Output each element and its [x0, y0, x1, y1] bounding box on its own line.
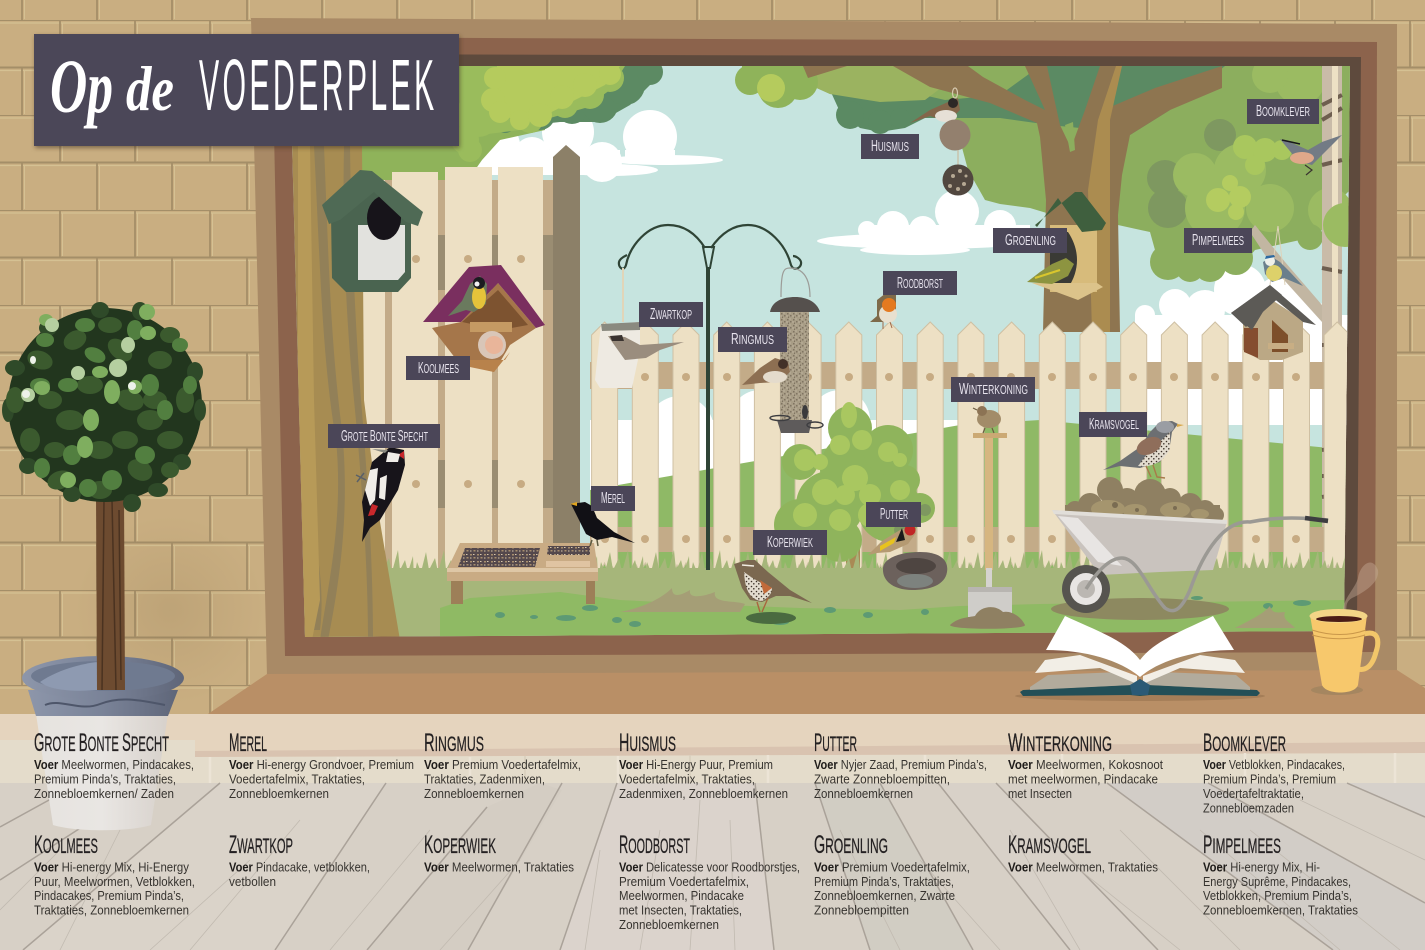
entry: grote bonte specht: Premium Pinda’s, Traktaties,	[34, 772, 176, 786]
entry: huismus: Voedertafelmix, Traktaties,	[619, 772, 755, 786]
label: merel	[591, 486, 635, 511]
entry: pimpelmees: PIMPELMEES	[1203, 831, 1281, 859]
fence post	[553, 145, 580, 575]
entry: roodborst: met Insecten, Traktaties,	[619, 902, 742, 918]
bird: putter	[868, 524, 916, 555]
entry: ringmus: Voer Premium Voedertafelmix,	[424, 757, 581, 772]
entry: grote bonte specht	[34, 729, 194, 801]
entry: zwartkop	[229, 831, 370, 889]
label: ringmus	[718, 327, 787, 352]
entry: merel: Voedertafelmix, Traktaties,	[229, 772, 365, 786]
shepherd hook pole	[619, 225, 801, 570]
groenling feeder	[1032, 192, 1106, 300]
entry: groenling: GROENLING	[814, 831, 888, 859]
bird: groenling	[1027, 258, 1074, 284]
entry: winterkoning: met meelwormen, Pindacake	[1008, 772, 1158, 786]
big fence boards on the left	[360, 167, 553, 575]
label: merel: MEREL	[601, 490, 625, 507]
book spine	[1130, 679, 1150, 695]
bird: roodborst	[870, 293, 897, 329]
entry: boomklever	[1203, 729, 1345, 816]
entry: pimpelmees: Energy Suprême, Pindacakes,	[1203, 874, 1351, 889]
entry: putter	[814, 729, 987, 801]
entry: putter: Zwarte Zonnebloempitten,	[814, 772, 950, 786]
canopy top left	[362, 66, 663, 180]
entry: koolmees: KOOLMEES	[34, 831, 98, 859]
entry: kramsvogel: Voer Meelwormen, Traktaties	[1008, 860, 1158, 874]
entry: koolmees: Voer Hi-energy Mix, Hi-Energy	[34, 860, 189, 874]
entry: boomklever: BOOMKLEVER	[1203, 729, 1286, 757]
entry: huismus	[619, 729, 788, 801]
entry: boomklever: Voedertafeltraktatie,	[1203, 786, 1304, 801]
wheelbarrow	[1051, 477, 1328, 620]
canopy top middle and right	[735, 55, 1352, 282]
label: koperwiek: KOPERWIEK	[767, 534, 813, 551]
ringmus feeder	[770, 268, 823, 433]
label: koolmees: KOOLMEES	[418, 360, 459, 377]
label: grote bonte specht: GROTE BONTE SPECHT	[341, 428, 428, 445]
book cover	[1020, 679, 1260, 696]
entry: winterkoning: met Insecten	[1008, 786, 1072, 801]
entry: pimpelmees	[1203, 831, 1358, 918]
book shadow	[1015, 691, 1265, 701]
nest box	[322, 170, 423, 292]
entry: roodborst: Voer Delicatesse voor Roodborstjes,	[619, 860, 800, 874]
bird: huismus	[910, 98, 960, 123]
bird: winterkoning	[973, 406, 1001, 433]
entry: roodborst: Zonnebloemkernen	[619, 917, 719, 932]
label: putter: PUTTER	[880, 506, 908, 523]
bird: koolmees	[448, 276, 487, 316]
entry: roodborst: Meelwormen, Pindacake	[619, 888, 744, 903]
entry: ringmus: Traktaties, Zadenmixen,	[424, 772, 545, 786]
mug handle	[1355, 633, 1378, 669]
label: putter	[866, 502, 921, 527]
book raised pages	[1046, 616, 1140, 677]
label: kramsvogel	[1079, 412, 1147, 437]
mug body	[1310, 615, 1367, 692]
label: koolmees	[406, 356, 470, 380]
soil heap	[1065, 477, 1224, 523]
entry: ringmus: RINGMUS	[424, 729, 484, 757]
label: huismus	[861, 134, 919, 159]
coffee mug	[1310, 562, 1378, 695]
entry: grote bonte specht: Voer Meelwormen, Pindacakes,	[34, 757, 194, 772]
species list	[34, 729, 1358, 932]
mug steam	[1343, 562, 1378, 618]
entry: roodborst: ROODBORST	[619, 831, 690, 859]
label: pimpelmees: PIMPELMEES	[1192, 232, 1244, 249]
label: winterkoning: WINTERKONING	[959, 381, 1028, 398]
dirt pile at shovel	[950, 607, 1025, 629]
birch tree	[1252, 66, 1348, 568]
bird: merel	[570, 502, 635, 546]
left tree trunk	[292, 146, 400, 640]
label: zwartkop: ZWARTKOP	[650, 306, 692, 323]
bird: pimpelmees	[1263, 255, 1303, 286]
label: roodborst: ROODBORST	[897, 275, 943, 292]
entry: kramsvogel	[1008, 831, 1158, 874]
entry: boomklever: Zonnebloemzaden	[1203, 800, 1294, 816]
barrow wheel	[1062, 565, 1110, 613]
entry: huismus: Zadenmixen, Zonnebloemkernen	[619, 786, 788, 801]
entry: koolmees: Pindacakes, Premium Pinda’s,	[34, 888, 184, 903]
entry: huismus: Voer Hi-Energy Puur, Premium	[619, 757, 773, 772]
entry: groenling: Zonnebloemkernen, Zwarte	[814, 888, 955, 903]
entry: winterkoning	[1008, 729, 1163, 801]
entry: groenling	[814, 831, 970, 918]
entry: huismus: HUISMUS	[619, 729, 676, 757]
entry: roodborst	[619, 831, 800, 932]
barrow shadow	[1051, 598, 1229, 620]
label: roodborst	[883, 271, 957, 295]
entry: ringmus	[424, 729, 581, 801]
barrow tray	[1052, 510, 1227, 575]
label: groenling: GROENLING	[1005, 232, 1056, 249]
entry: pimpelmees: Vetblokken, Premium Pinda’s,	[1203, 888, 1352, 903]
entry: zwartkop: vetbollen	[229, 874, 276, 889]
bird: grote bonte specht	[356, 447, 405, 542]
ground	[290, 548, 1350, 640]
entry: pimpelmees: Voer Hi-energy Mix, Hi-	[1203, 860, 1320, 874]
shovel	[968, 433, 1012, 617]
book lower pages	[1030, 672, 1137, 690]
entry: putter: PUTTER	[814, 729, 857, 757]
entry: koperwiek: Voer Meelwormen, Traktaties	[424, 860, 574, 874]
window sill	[205, 670, 1425, 716]
title word VOEDERPLEK: VOEDERPLEK	[199, 45, 438, 126]
bird: zwartkop	[608, 335, 684, 360]
entry: koolmees: Puur, Meelwormen, Vetblokken,	[34, 874, 195, 889]
olive leaf mass	[810, 66, 1350, 268]
entry: merel: MEREL	[229, 729, 267, 757]
entry: pimpelmees: Zonnebloemkernen, Traktaties	[1203, 902, 1358, 918]
entry: zwartkop: Voer Pindacake, vetblokken,	[229, 860, 370, 874]
entry: kramsvogel: KRAMSVOGEL	[1008, 831, 1091, 859]
clouds	[465, 106, 1350, 520]
bird: ringmus	[742, 358, 790, 385]
entry: groenling: Voer Premium Voedertafelmix,	[814, 860, 970, 874]
entry: putter: Voer Nyjer Zaad, Premium Pinda’s,	[814, 757, 987, 772]
plant pot	[22, 656, 184, 830]
label: groenling	[993, 228, 1067, 253]
plant foliage	[2, 302, 206, 512]
entry: koolmees: Traktaties, Zonnebloemkernen	[34, 902, 189, 918]
koolmees feeder	[423, 265, 545, 372]
label: kramsvogel: KRAMSVOGEL	[1089, 416, 1139, 433]
title banner	[34, 34, 459, 146]
entry: winterkoning: Voer Meelwormen, Kokosnoot	[1008, 757, 1163, 772]
entry: putter: Zonnebloemkernen	[814, 786, 913, 801]
entry: groenling: Premium Pinda’s, Traktaties,	[814, 874, 954, 889]
label: grote bonte specht	[328, 424, 440, 448]
entry: merel: Voer Hi-energy Grondvoer, Premium	[229, 757, 414, 772]
entry: merel	[229, 729, 414, 801]
picket fence rails	[590, 362, 1350, 552]
shrub	[774, 402, 935, 570]
pimpelmees house	[1231, 226, 1316, 360]
bird bath	[883, 552, 947, 590]
garden scene	[285, 55, 1367, 640]
label: zwartkop	[639, 302, 703, 327]
right tree trunk	[803, 66, 1222, 332]
window frame	[251, 18, 1397, 676]
entry: groenling: Zonnebloempitten	[814, 902, 909, 918]
fat balls	[940, 88, 974, 196]
topiary plant	[2, 302, 206, 830]
label: boomklever: BOOMKLEVER	[1256, 103, 1310, 120]
entry: zwartkop: ZWARTKOP	[229, 831, 293, 859]
open book	[1015, 616, 1265, 701]
zwartkop log feeder	[595, 268, 640, 388]
bird: kramsvogel	[1103, 421, 1184, 478]
brick wall background	[0, 0, 1425, 720]
entry: grote bonte specht: GROTE BONTE SPECHT	[34, 729, 169, 757]
label: pimpelmees	[1184, 228, 1252, 253]
label: huismus: HUISMUS	[871, 138, 909, 155]
entry: ringmus: Zonnebloemkernen	[424, 786, 524, 801]
wall base and skirting	[0, 714, 1425, 786]
entry: winterkoning: WINTERKONING	[1008, 729, 1112, 757]
label: koperwiek	[753, 530, 827, 555]
entry: merel: Zonnebloemkernen	[229, 786, 329, 801]
bird: koperwiek	[734, 560, 812, 624]
label: boomklever	[1247, 99, 1319, 124]
entry: koperwiek: KOPERWIEK	[424, 831, 496, 859]
wooden floor	[0, 783, 1425, 950]
entry: boomklever: Premium Pinda’s, Premium	[1203, 772, 1336, 786]
entry: koperwiek	[424, 831, 574, 874]
entry: koolmees	[34, 831, 195, 918]
bird: boomklever	[1280, 135, 1342, 175]
bird feeding table	[447, 543, 598, 604]
label: ringmus: RINGMUS	[731, 331, 774, 348]
title script Op: Op	[50, 45, 113, 129]
background hill	[590, 420, 1350, 580]
entry: grote bonte specht: Zonnebloemkernen/ Zaden	[34, 786, 174, 801]
picket fence	[592, 322, 1350, 575]
title script de: de	[126, 53, 174, 124]
barrow frame and handle	[1086, 518, 1328, 611]
label: winterkoning	[951, 377, 1035, 402]
sign labels	[328, 99, 1319, 555]
entry: roodborst: Premium Voedertafelmix,	[619, 874, 749, 889]
entry: boomklever: Voer Vetblokken, Pindacakes,	[1203, 757, 1345, 772]
sky	[285, 60, 1355, 640]
plant stem	[96, 495, 125, 690]
